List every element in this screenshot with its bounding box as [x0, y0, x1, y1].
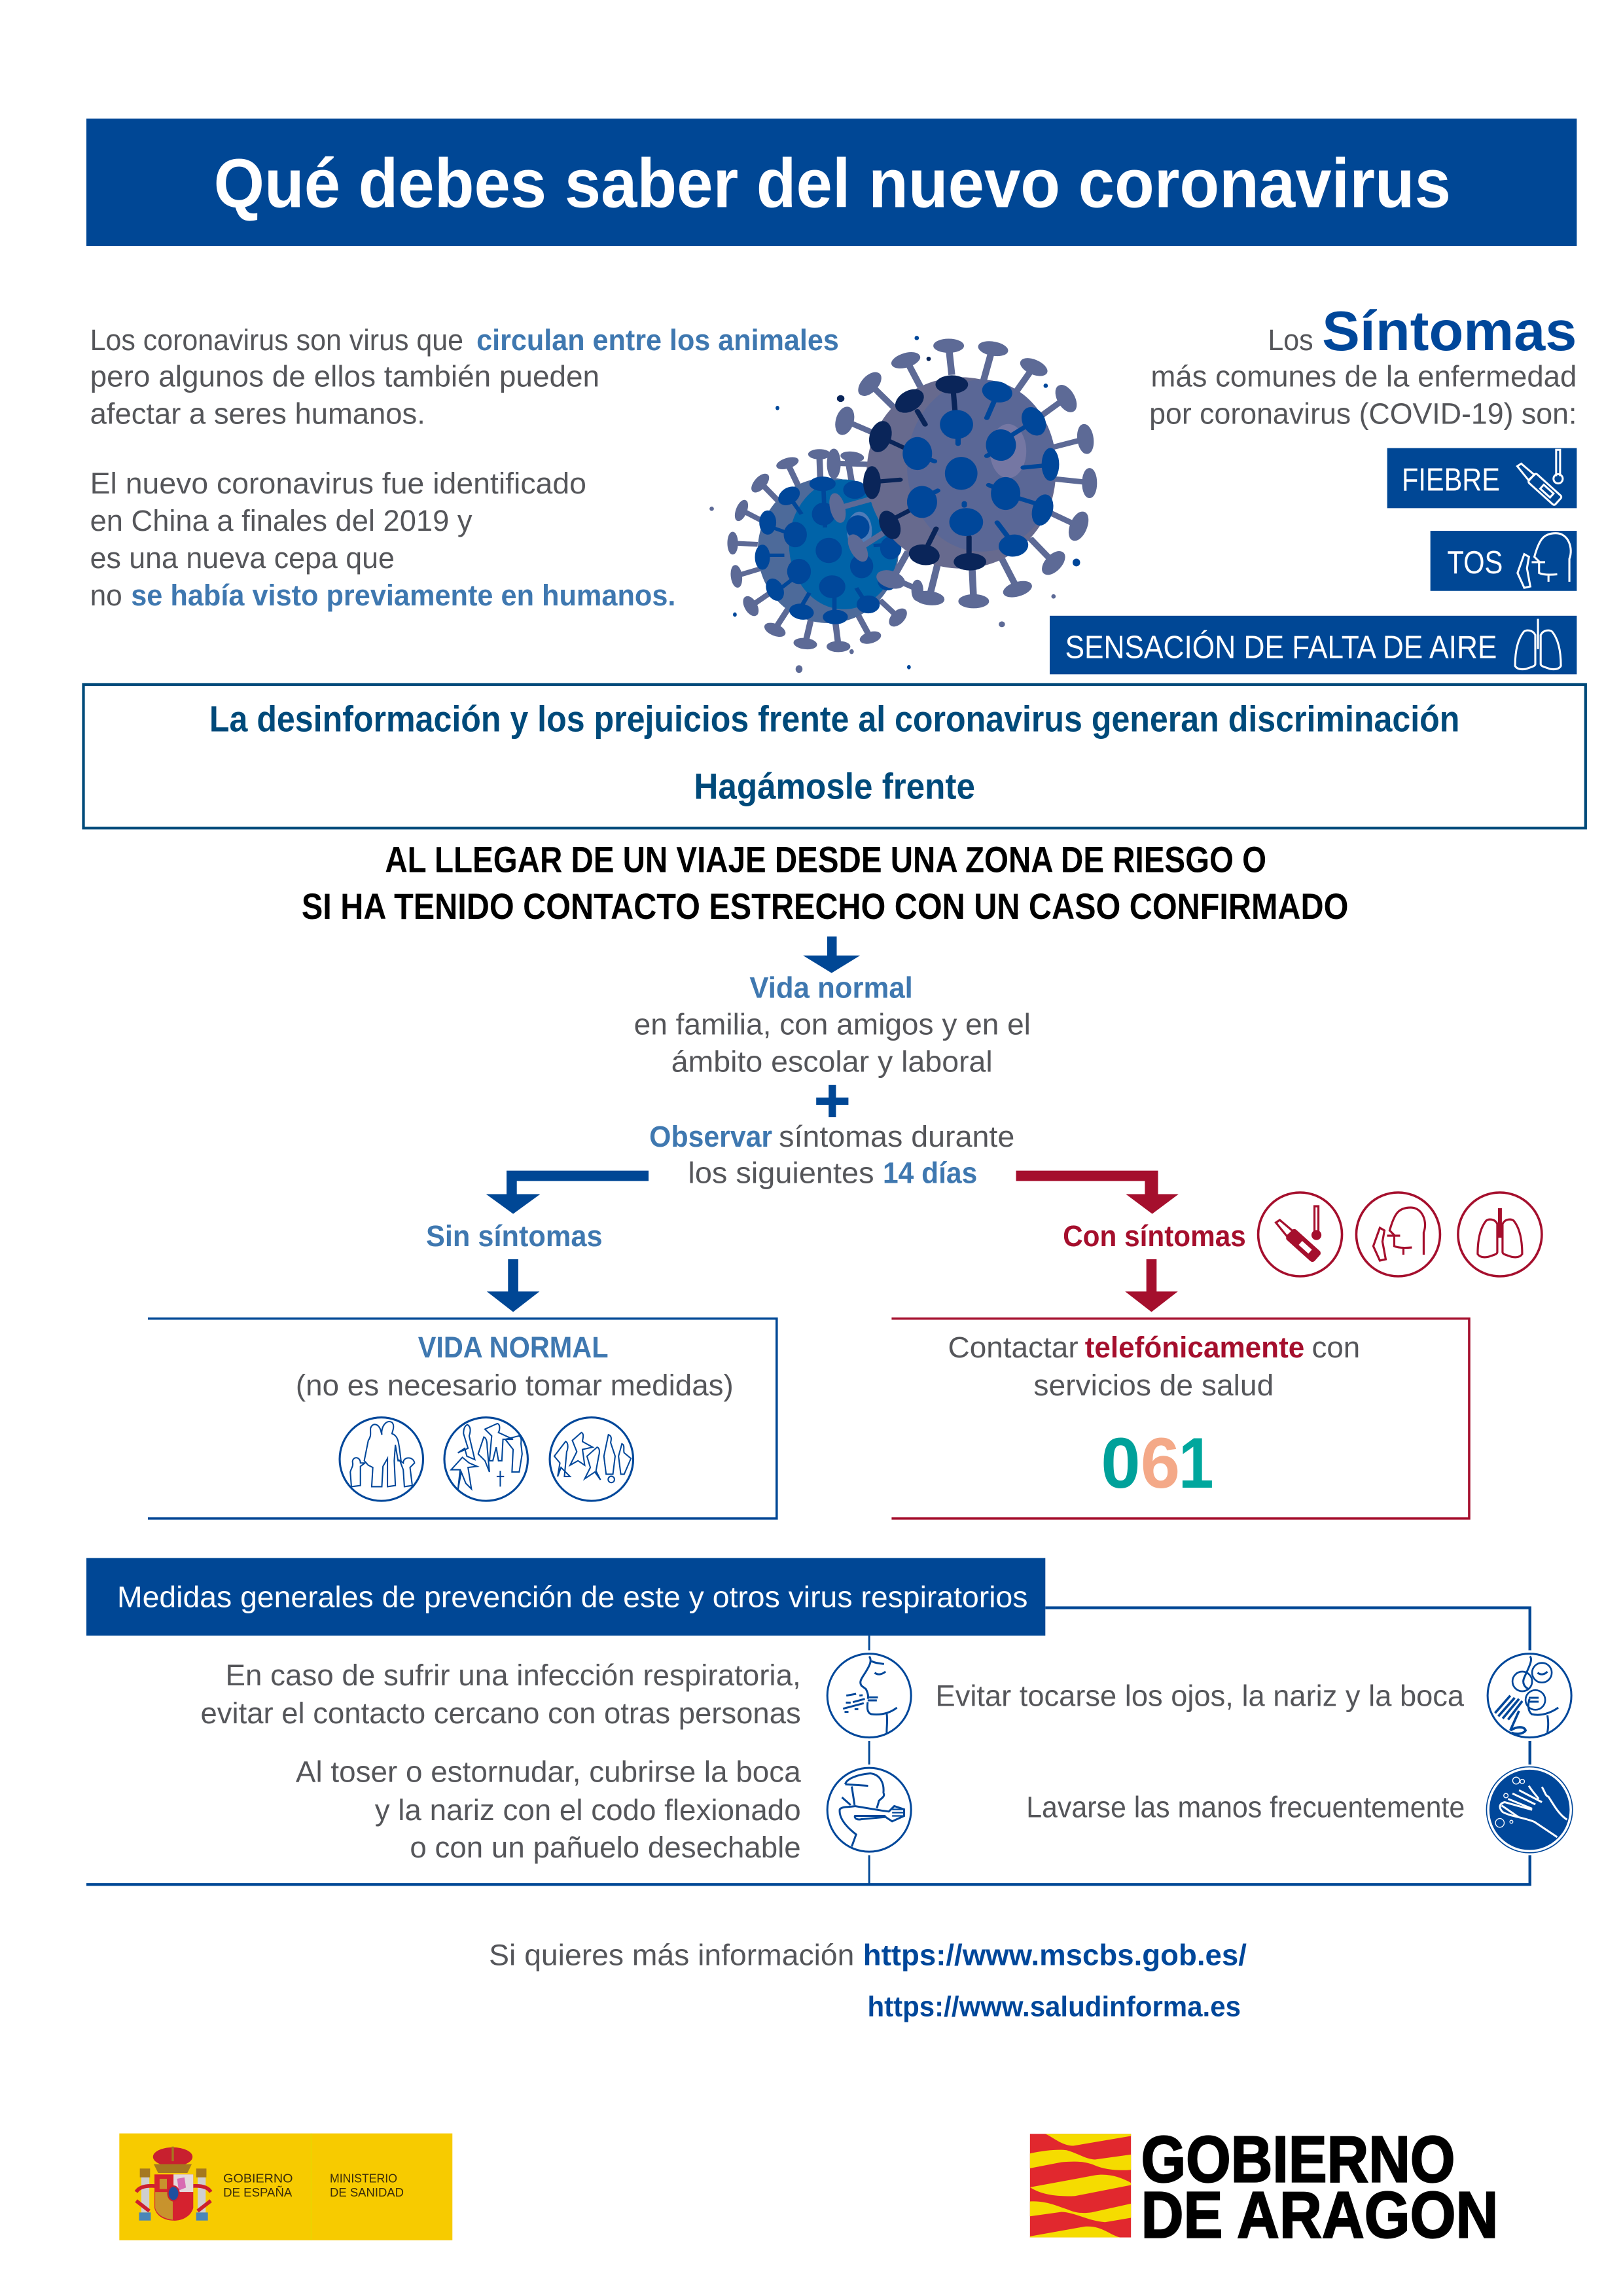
ministry text: DE ESPAÑA — [223, 2185, 293, 2199]
intro text block — [90, 323, 839, 612]
icon: family — [340, 1418, 423, 1501]
prevention heading: Medidas generales de prevención de este y otros virus respiratorios — [117, 1579, 1027, 1613]
intro text block: pero algunos de ellos también pueden — [90, 359, 599, 393]
symptom: shortness of breath: SENSACIÓN DE FALTA DE AIRE — [1065, 630, 1497, 666]
Aragón wordmark — [1141, 2123, 1498, 2251]
ministry text — [223, 2172, 404, 2199]
arrow: down to normal life — [803, 937, 860, 973]
logo: Gobierno de Aragón — [1030, 2123, 1498, 2251]
text: contact by phone: con — [1311, 1330, 1360, 1364]
icon: friends — [444, 1418, 527, 1501]
coat of arms — [136, 2147, 211, 2221]
intro text block: en China a finales del 2019 y — [90, 503, 473, 537]
label: no symptoms: Sin síntomas — [426, 1219, 603, 1253]
Aragón wordmark: GOBIERNO — [1141, 2123, 1455, 2196]
Aragón flag — [1030, 2134, 1131, 2238]
arrow: no symptoms branch — [486, 1171, 649, 1214]
symptom: shortness of breath — [1050, 616, 1577, 674]
phone number 061: 6 — [1141, 1424, 1180, 1503]
text: cover cough: o con un pañuelo desechable — [410, 1830, 801, 1864]
symptom: fever — [1387, 448, 1577, 508]
ministry text: MINISTERIO — [330, 2172, 397, 2185]
label: with symptoms: Con síntomas — [1063, 1219, 1246, 1253]
text: normal life: ámbito escolar y laboral — [671, 1045, 993, 1079]
text: more information links — [489, 1937, 1247, 2023]
phone number 061: 0 — [1101, 1424, 1141, 1503]
symptoms heading: Los — [1268, 323, 1313, 357]
text: avoid contact: En caso de sufrir una infección respiratoria, — [226, 1658, 801, 1692]
intro text block: Los coronavirus son virus que — [90, 323, 463, 357]
symptom: cough: TOS — [1447, 545, 1503, 581]
text: normal life: en familia, con amigos y en el — [634, 1007, 1031, 1041]
intro text block: no — [90, 578, 122, 612]
icon: red lungs — [1458, 1193, 1542, 1276]
icon: playing — [550, 1418, 633, 1501]
text: observe symptoms: síntomas durante — [779, 1119, 1014, 1153]
icon: red fever — [1258, 1193, 1342, 1276]
icon: washing hands — [1484, 1765, 1575, 1856]
text: contact by phone: servicios de salud — [1033, 1368, 1274, 1402]
text: more information links: Si quieres más información — [489, 1937, 854, 1971]
panel: contact health services — [891, 1319, 1469, 1518]
heading: travel condition — [302, 838, 1348, 927]
ministry text: GOBIERNO — [223, 2172, 293, 2185]
symptoms heading: Síntomas — [1322, 300, 1577, 363]
heading: travel condition: SI HA TENIDO CONTACTO ESTRECHO CON UN CASO CONFIRMADO — [302, 886, 1348, 927]
intro text block: se había visto previamente en humanos. — [131, 578, 675, 612]
phone number 061 — [1101, 1424, 1214, 1503]
text: avoid contact — [200, 1658, 801, 1730]
text: observe symptoms: los siguientes — [688, 1156, 874, 1190]
text: wash hands: Lavarse las manos frecuentemente — [1026, 1789, 1465, 1823]
text: observe symptoms: 14 días — [883, 1156, 977, 1190]
title banner: Qué debes saber del nuevo coronavirus — [214, 145, 1451, 223]
text: normal life — [634, 971, 1031, 1079]
large virus — [828, 340, 1096, 607]
text: more information links: https://www.saludinforma.es — [867, 1992, 1241, 2023]
symptoms heading: más comunes de la enfermedad — [1150, 359, 1577, 393]
text: contact by phone — [948, 1330, 1360, 1402]
logo: Gobierno de España — [119, 2134, 452, 2240]
Aragón wordmark: DE ARAGON — [1141, 2178, 1498, 2251]
icon: plus — [816, 1085, 848, 1117]
intro text block: afectar a seres humanos. — [90, 397, 425, 431]
symptom: cough — [1431, 531, 1577, 591]
icon: red cough — [1356, 1193, 1440, 1276]
callout: disinformation box: La desinformación y los prejuicios frente al coronavirus generan discriminación — [209, 698, 1459, 740]
icon: no touching face — [1484, 1650, 1575, 1741]
intro text block: es una nueva cepa que — [90, 541, 395, 575]
title banner — [86, 118, 1577, 246]
text: observe symptoms — [649, 1119, 1014, 1190]
callout: disinformation box — [84, 685, 1586, 828]
callout: disinformation box: Hagámosle frente — [694, 765, 975, 806]
panel: normal life — [148, 1319, 777, 1518]
text: contact by phone: telefónicamente — [1085, 1330, 1304, 1364]
phone number 061: 1 — [1179, 1424, 1214, 1503]
text: avoid touching face: Evitar tocarse los ojos, la nariz y la boca — [936, 1678, 1465, 1712]
text: cover cough: Al toser o estornudar, cubrirse la boca — [296, 1755, 801, 1789]
text: observe symptoms: Observar — [649, 1119, 772, 1153]
intro text block: El nuevo coronavirus fue identificado — [90, 466, 586, 500]
panel: prevention measures — [86, 1558, 1575, 1884]
symptom: fever: FIEBRE — [1402, 462, 1500, 498]
symptoms heading: por coronavirus (COVID-19) son: — [1149, 397, 1577, 431]
text: cover cough — [296, 1755, 801, 1864]
prevention heading — [86, 1558, 1045, 1636]
intro text block: circulan entre los animales — [476, 323, 839, 357]
symptoms heading — [1149, 300, 1577, 431]
icon: cover with elbow — [824, 1765, 915, 1856]
text: more information links: https://www.mscbs.gob.es/ — [863, 1937, 1247, 1971]
arrow: down to contact box — [1125, 1259, 1178, 1312]
text: normal life: Vida normal — [749, 971, 913, 1005]
text: cover cough: y la nariz con el codo flexionado — [375, 1793, 801, 1827]
panel: symptoms — [1050, 300, 1577, 674]
ministry text: DE SANIDAD — [330, 2185, 404, 2199]
floating particles — [709, 336, 1080, 673]
small virus — [728, 450, 909, 651]
arrow: down to normal life box — [487, 1259, 539, 1312]
coronavirus illustration — [709, 336, 1096, 673]
text: contact by phone: Contactar — [948, 1330, 1079, 1364]
heading: VIDA NORMAL: VIDA NORMAL — [418, 1330, 609, 1364]
icon: sneezing face — [824, 1650, 915, 1741]
text: avoid contact: evitar el contacto cercano con otras personas — [200, 1696, 801, 1730]
arrow: symptoms branch — [1016, 1171, 1179, 1214]
heading: travel condition: AL LLEGAR DE UN VIAJE DESDE UNA ZONA DE RIESGO O — [385, 838, 1266, 880]
text: no measures: (no es necesario tomar medidas) — [296, 1368, 734, 1402]
